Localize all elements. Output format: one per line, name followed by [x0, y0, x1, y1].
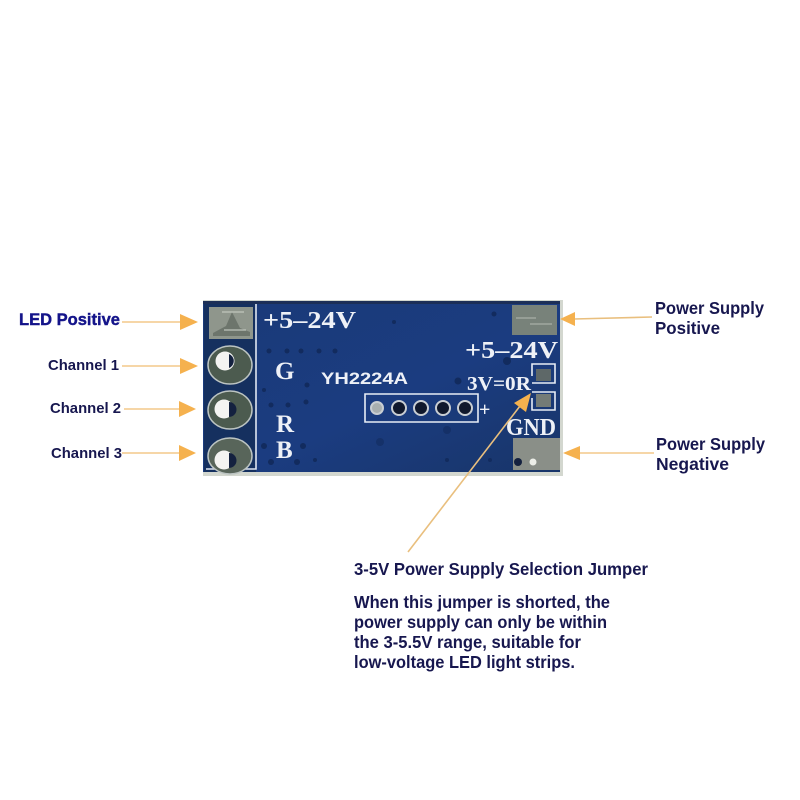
arrow: channel 2: [124, 401, 196, 417]
jumper pads: [532, 364, 555, 410]
arrow: channel 1: [122, 358, 198, 374]
header holes: [365, 394, 478, 422]
text block: jumper description: When this jumper is shorted, the: [354, 592, 610, 612]
pad: power supply negative: [513, 438, 560, 470]
circuit board: [203, 300, 563, 476]
label: Channel 3: Channel 3: [51, 445, 122, 462]
pad: channel 2: [208, 391, 252, 429]
label: Channel 1: Channel 1: [48, 357, 119, 374]
arrow: jumper: [408, 393, 531, 552]
label: Power Supply Negative: Negative: [656, 454, 729, 474]
label: Channel 2: Channel 2: [50, 400, 121, 417]
text block: jumper description: power supply can only be within: [354, 612, 607, 632]
pad: LED positive: [209, 307, 253, 339]
silkscreen: R: R: [276, 411, 295, 438]
vias: [261, 312, 511, 465]
silkscreen: GND: GND: [506, 415, 556, 441]
arrow: LED positive: [122, 314, 198, 330]
pad: channel 3: [208, 438, 252, 474]
label: Power Supply Positive: Positive: [655, 318, 720, 338]
pad: power supply positive: [512, 305, 557, 335]
label: LED Positive: LED Positive: [19, 311, 120, 329]
silkscreen: 3V=0R: 3V=0R: [467, 373, 532, 395]
heading: jumper: 3-5V Power Supply Selection Jumper: [354, 559, 648, 579]
arrow: channel 3: [122, 445, 196, 461]
silkscreen: B: B: [276, 437, 293, 464]
pad: channel 1: [208, 346, 252, 384]
text block: jumper description: low-voltage LED light strips.: [354, 652, 575, 672]
silkscreen: model number: YH2224A: [321, 369, 408, 388]
silkscreen: +5-24V right: +5–24V: [465, 338, 559, 364]
label: Power Supply Negative: Power Supply: [656, 434, 765, 454]
arrow: power supply negative: [563, 446, 654, 460]
silkscreen: +5-24V left: +5–24V: [263, 308, 357, 334]
arrow: power supply positive: [560, 312, 652, 326]
silkscreen: G: G: [275, 358, 294, 385]
text block: jumper description: the 3-5.5V range, suitable for: [354, 632, 581, 652]
silkscreen: plus: +: [479, 399, 490, 421]
label: Power Supply Positive: Power Supply: [655, 298, 764, 318]
